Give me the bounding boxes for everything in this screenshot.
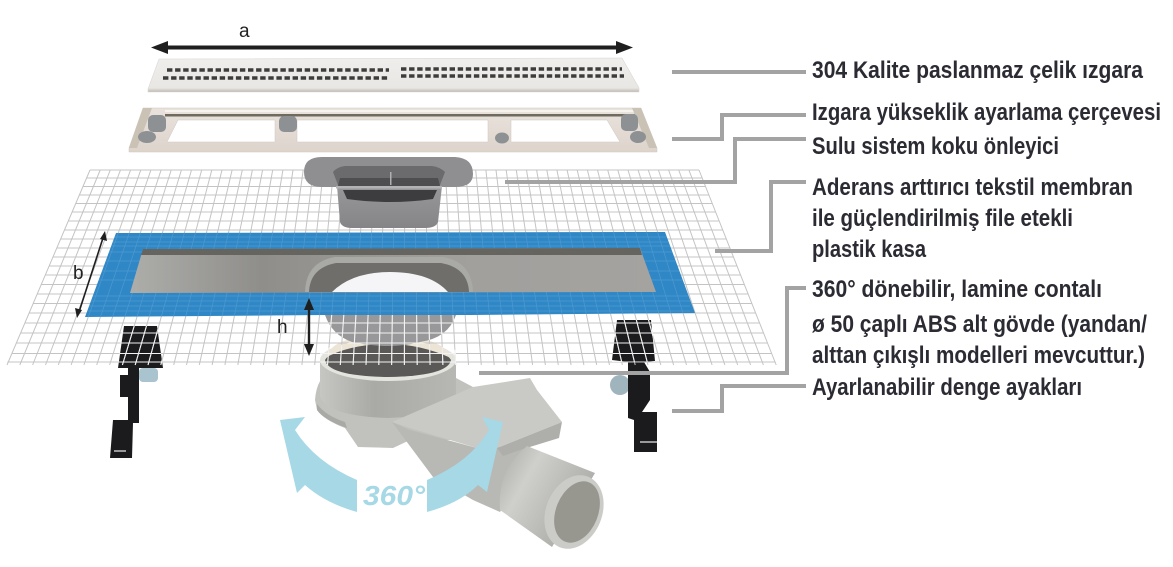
drain cylinder bbox=[320, 360, 456, 418]
label: lower housing bbox=[812, 276, 1147, 369]
dimension label b: b bbox=[73, 263, 84, 284]
outlet pipe bbox=[500, 446, 595, 547]
label: plastic body bbox=[812, 174, 1133, 263]
grate bbox=[148, 58, 639, 92]
360 rotation arrow right bbox=[427, 417, 503, 512]
left adjustable foot bbox=[110, 326, 163, 458]
label: lower housing: 360° dönebilir, lamine contalı bbox=[812, 276, 1102, 303]
label: plastic body: ile güçlendirilmiş file etekli bbox=[812, 205, 1073, 232]
dimension h arrow bbox=[304, 298, 314, 356]
steel channel bbox=[130, 248, 656, 293]
label: plastic body: plastik kasa bbox=[812, 236, 927, 263]
dimension label h: h bbox=[277, 317, 288, 338]
dimension b arrow bbox=[75, 231, 107, 318]
leader lines bbox=[479, 72, 806, 411]
dimension a arrow bbox=[151, 41, 633, 54]
height adjustment frame bbox=[129, 108, 657, 152]
drain opening bbox=[305, 257, 473, 292]
outlet top face bbox=[392, 378, 562, 448]
360 degree label: 360° bbox=[363, 480, 426, 511]
frame bolts bbox=[138, 114, 646, 144]
odour trap bbox=[304, 157, 473, 228]
dimension label a: a bbox=[239, 21, 250, 42]
funnel bowl under channel bbox=[325, 315, 456, 346]
label: odour trap: Sulu sistem koku önleyici bbox=[812, 133, 1059, 160]
blue membrane frame bbox=[85, 232, 695, 317]
mesh skirt bbox=[7, 170, 776, 365]
drain flange bbox=[315, 378, 473, 448]
outlet lower side bbox=[392, 422, 530, 512]
mesh over dark parts bbox=[118, 315, 655, 366]
drain body: ABS lower housing with side outlet bbox=[315, 339, 614, 558]
label: feet: Ayarlanabilir denge ayakları bbox=[812, 374, 1082, 401]
360 rotation arrow left bbox=[280, 417, 357, 512]
right adjustable foot bbox=[610, 320, 657, 452]
white dome bbox=[332, 272, 448, 292]
drain cylinder mouth bbox=[320, 339, 456, 381]
